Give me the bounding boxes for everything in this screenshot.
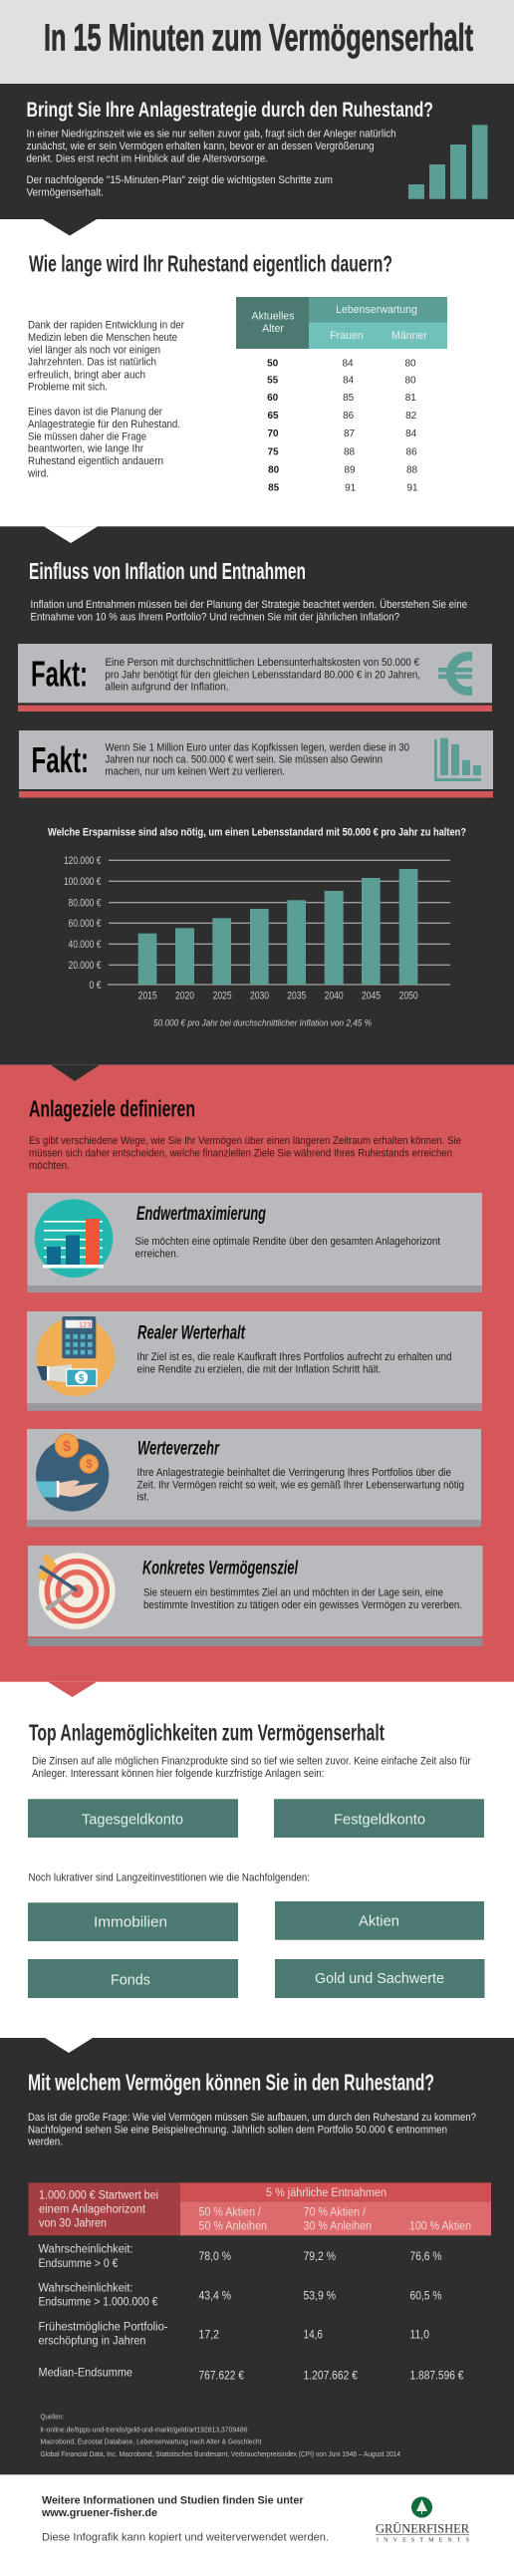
button: Immobilien: Immobilien (94, 1913, 167, 1930)
icon: calculator and money: 123 (79, 1320, 92, 1329)
text block: sources: Macrobond, Eurostat Database, Lebenserwartung nach Alter & Geschlecht (40, 2437, 261, 2446)
x axis labels: 2050 (399, 991, 418, 1002)
callout: fact 2: Wenn Sie 1 Million Euro unter das Kopfkissen legen, werden diese in 30 (106, 741, 409, 753)
button: Gold und Sachwerte: Gold und Sachwerte (315, 1970, 444, 1987)
text block: inflation intro: Inflation und Entnahmen müssen bei der Planung der Strategie beachtet werden. Überstehen Sie eine (30, 599, 467, 611)
card: consumption: Werteverzehr (137, 1438, 220, 1459)
button: Aktien: Aktien (359, 1912, 399, 1929)
table: life expectancy: 75 (267, 446, 279, 457)
icon: euro (438, 652, 472, 696)
arrow: section pointer (45, 2038, 93, 2053)
callout: fact 2: machen, nur um keinen Wert zu verlieren. (106, 765, 285, 777)
footer text (41, 2494, 329, 2544)
button: Aktien (275, 1901, 484, 1940)
table: life expectancy: Lebenserwartung (336, 304, 417, 316)
text block: example (27, 2112, 476, 2148)
x axis labels: 2030 (250, 991, 269, 1002)
button: Gold und Sachwerte (275, 1959, 484, 1998)
x axis labels (138, 991, 418, 1002)
text block: sources: Quellen: (40, 2413, 64, 2422)
footer text: Diese Infografik kann kopiert und weiterverwendet werden. (42, 2532, 329, 2544)
text block: inflation intro (30, 599, 467, 623)
x axis labels: 2025 (213, 991, 232, 1002)
table: withdrawal scenarios: 30 % Anleihen (303, 2221, 372, 2233)
callout: fact 1: Eine Person mit durchschnittlichen Lebensunterhaltskosten von 50.000 € (106, 657, 419, 669)
table: withdrawal scenarios: Wahrscheinlichkeit: (38, 2282, 133, 2294)
icon: calculator and money: $ (79, 1373, 85, 1384)
arrow: section pointer (44, 526, 98, 543)
x axis labels: 2045 (362, 991, 381, 1002)
table: withdrawal scenarios: 5 % jährliche Entnahmen (266, 2187, 386, 2199)
heading: inflation: Einfluss von Inflation und Entnahmen (29, 558, 306, 584)
table: life expectancy: 81 (405, 393, 416, 404)
callout: fact 2 (19, 730, 493, 797)
panel: retirement duration (27, 219, 447, 493)
text block: life expectancy: Sie müssen daher die Frage (28, 430, 146, 442)
table: life expectancy: 70 (267, 429, 279, 439)
table: withdrawal scenarios: 14,6 (303, 2330, 323, 2342)
icon: coins and hand (36, 1434, 109, 1512)
footer (41, 2494, 469, 2544)
icon: coins and hand: $ (86, 1459, 93, 1471)
card: final value: Endwertmaximierung (136, 1204, 266, 1225)
button: Immobilien (28, 1902, 238, 1941)
arrow: section pointer (48, 1682, 97, 1697)
x axis labels: 2040 (325, 991, 344, 1002)
card: concrete target: Sie steuern ein bestimmtes Ziel an und möchten in der Lage sein, eine (143, 1586, 443, 1598)
text block: sources: Global Financial Data, Inc. Macrobond, Statistisches Bundesamt, Verbraucherpreisindex (CPI) von Juni 1948 – August 2014 (40, 2449, 400, 2458)
text block: inflation intro: Entnahme von 10 % aus Ihrem Portfolio? Und rechnen Sie mit der jährlichen Inflation? (30, 611, 399, 623)
intro text (26, 129, 396, 199)
intro text: denkt. Dies erst recht im Hinblick auf die Altersvorsorge. (26, 153, 268, 165)
card: concrete target: Konkretes Vermögensziel (142, 1558, 298, 1578)
chart title: Welche Ersparnisse sind also nötig, um einen Lebensstandard mit 50.000 € pro Jahr zu halten? (48, 826, 466, 838)
table: life expectancy: 80 (268, 464, 280, 475)
table: withdrawal scenarios: 50 % Aktien / (199, 2206, 262, 2218)
callout: fact 1: Fakt: (31, 654, 88, 695)
table: life expectancy: 88 (406, 464, 417, 475)
y axis labels (64, 855, 102, 992)
table: life expectancy: Alter (262, 323, 284, 335)
header: title band (0, 0, 514, 84)
intro text: In einer Niedrigzinszeit wie es sie nur selten zuvor gab, fragt sich der Anleger natürlich (26, 129, 396, 141)
table: withdrawal scenarios: 1.207.662 € (303, 2371, 359, 2383)
chart caption: 50.000 € pro Jahr bei durchschnittlicher Inflation von 2,45 % (153, 1017, 372, 1028)
text block: goals intro: möchten. (29, 1160, 70, 1172)
table: life expectancy: 89 (344, 464, 356, 475)
table: withdrawal scenarios: einem Anlagehorizont (39, 2203, 146, 2215)
intro text: zunächst, wie er sein Vermögen erhalten kann, bevor er an dessen Vergrößerung (26, 141, 375, 152)
text block: short term: Anleger. Interessant können hier folgende kurzfristige Anlagen sein: (32, 1768, 325, 1780)
text block: life expectancy: Medizin leben die Menschen heute (28, 332, 177, 344)
icon: chart circle (35, 1199, 113, 1278)
heading: goals: Anlageziele definieren (29, 1096, 195, 1122)
text block: example: Nachfolgend sehen Sie eine Beispielrechnung. Jährlich sollen dem Portfolio 50.000 € entnommen (28, 2124, 447, 2136)
table: life expectancy: 84 (343, 376, 355, 387)
x axis labels: 2035 (287, 991, 306, 1002)
panel: inflation and withdrawals (0, 526, 514, 1065)
table: life expectancy: Aktuelles (251, 311, 295, 323)
logo: Grüner Fisher Investments: INVESTMENTS (377, 2538, 469, 2544)
button: Fonds (28, 1959, 238, 1998)
table: life expectancy: 65 (267, 411, 279, 422)
callout: fact 2: Fakt: (32, 739, 89, 780)
table: withdrawal scenarios: erschöpfung in Jahren (38, 2336, 145, 2348)
table: life expectancy: 85 (343, 393, 355, 404)
text block: life expectancy: Anlagestrategie für den Ruhestand. (28, 419, 180, 430)
panel: investment goals (0, 1065, 514, 1682)
logo: Grüner Fisher Investments: GRÜNERFISHER (376, 2521, 469, 2536)
table: withdrawal scenarios: 17,2 (199, 2330, 219, 2342)
y axis labels: 120.000 € (64, 855, 102, 867)
table: withdrawal scenarios: Median-Endsumme (38, 2367, 132, 2379)
table: withdrawal scenarios: 1.887.596 € (410, 2371, 464, 2383)
card: real value: Ihr Ziel ist es, die reale Kaufkraft Ihres Portfolios aufrecht zu erhalten und (137, 1351, 452, 1363)
x axis labels: 2015 (138, 991, 157, 1002)
bars (138, 869, 417, 985)
icon: coins and hand: $ (63, 1438, 72, 1455)
text block: sources: lr-online.de/tipps-und-trends/geld-und-markt/geld/art192813,3709486 (40, 2425, 247, 2433)
text block: sources (40, 2413, 400, 2458)
text block: life expectancy: Jahrzehnten. Das ist natürlich (28, 357, 156, 369)
icon: calculator and money (36, 1316, 115, 1396)
card: consumption: ist. (137, 1492, 149, 1504)
table: withdrawal scenarios: 11,0 (410, 2330, 429, 2342)
icon: target and arrow (37, 1553, 116, 1629)
button: Fonds: Fonds (111, 1972, 150, 1989)
text block: goals intro: Es gibt verschiedene Wege, wie Sie Ihr Vermögen über einen längeren Zeitraum erhalten können. Sie (29, 1135, 461, 1147)
table: life expectancy: 84 (342, 359, 354, 370)
y axis labels: 60.000 € (68, 918, 102, 930)
text block: life expectancy: wird. (27, 467, 49, 479)
table: withdrawal scenarios: 60,5 % (410, 2290, 442, 2302)
table: withdrawal scenarios: 70 % Aktien / (303, 2206, 367, 2218)
button: Tagesgeldkonto: Tagesgeldkonto (82, 1812, 183, 1829)
table: life expectancy: 55 (267, 376, 279, 387)
card: real value: Realer Werterhalt (137, 1322, 245, 1343)
table: life expectancy: 82 (405, 411, 417, 422)
y axis labels: 20.000 € (68, 960, 102, 972)
table: withdrawal scenarios: 79,2 % (303, 2251, 336, 2263)
table: life expectancy: 80 (404, 359, 416, 370)
text block: life expectancy: Ruhestand eigentlich andauern (28, 455, 163, 467)
table: life expectancy: 50 (267, 359, 279, 370)
table: withdrawal scenarios: 100 % Aktien (409, 2221, 471, 2233)
x axis labels: 2020 (175, 991, 194, 1002)
button: Festgeldkonto: Festgeldkonto (334, 1811, 425, 1828)
text block: short term: Die Zinsen auf alle möglichen Finanzprodukte sind so tief wie selten zuvor. Keine einfache Zeit also für (32, 1756, 471, 1768)
text block: life expectancy: Dank der rapiden Entwicklung in der (28, 320, 184, 332)
table: life expectancy: 86 (343, 411, 355, 422)
text block: goals intro (29, 1135, 461, 1172)
table: withdrawal scenarios: 1.000.000 € Startwert bei (39, 2189, 158, 2201)
text block: example: Das ist die große Frage: Wie viel Vermögen müssen Sie aufbauen, um durch den Ruhestand zu kommen? (28, 2112, 476, 2124)
table: life expectancy: 86 (405, 446, 417, 457)
y axis labels: 40.000 € (68, 939, 102, 951)
y axis labels: 0 € (90, 980, 102, 992)
table: withdrawal scenarios: 76,6 % (410, 2251, 442, 2263)
arrow: section pointer (43, 219, 97, 235)
table: life expectancy: 60 (267, 393, 279, 404)
arrow: section pointer (51, 1065, 100, 1081)
table: life expectancy (236, 297, 447, 493)
text block: life expectancy: Eines davon ist die Planung der (28, 407, 162, 419)
button: Festgeldkonto (274, 1799, 484, 1838)
table: withdrawal scenarios: 43,4 % (199, 2290, 231, 2302)
panel: introduction (0, 84, 514, 219)
icon: rising bars (408, 125, 488, 199)
y axis labels: 80.000 € (68, 897, 102, 909)
card: consumption (27, 1429, 481, 1527)
table: withdrawal scenarios: von 30 Jahren (39, 2217, 107, 2229)
card: consumption: Zeit. Ihr Vermögen reicht so weit, wie es gemäß Ihrer Lebenserwartung nötig (137, 1479, 464, 1491)
table: life expectancy: 80 (404, 376, 416, 387)
card: final value: Sie möchten eine optimale Rendite über den gesamten Anlagehorizont (135, 1236, 440, 1248)
chart: required savings (48, 826, 466, 1028)
table: life expectancy: Frauen (330, 330, 364, 342)
intro text: Der nachfolgende "15-Minuten-Plan" zeigt die wichtigsten Schritte zum (26, 174, 333, 186)
callout: fact 1: pro Jahr benötigt für den gleichen Lebensstandard 80.000 € in 20 Jahren, (106, 669, 420, 681)
panel: required wealth (0, 2038, 514, 2474)
text block: life expectancy: Probleme mit sich. (28, 382, 108, 394)
table: withdrawal scenarios: 78,0 % (199, 2251, 231, 2263)
table: withdrawal scenarios: Endsumme > 0 € (38, 2258, 119, 2270)
table: withdrawal scenarios: Endsumme > 1.000.000 € (38, 2296, 158, 2308)
table: life expectancy: 91 (406, 482, 418, 493)
text block: short term (32, 1756, 471, 1780)
panel: top investment options (28, 1682, 484, 1998)
footer text: www.gruener-fisher.de (41, 2507, 157, 2519)
table: life expectancy: 87 (344, 429, 355, 439)
card: final value (28, 1193, 482, 1292)
table: withdrawal scenarios: 53,9 % (303, 2290, 336, 2302)
text block: example: werden. (27, 2137, 63, 2148)
table: withdrawal scenarios: Frühestmögliche Portfolio- (38, 2322, 168, 2334)
card: real value: eine Rendite zu erzielen, die mit der Inflation Schritt hält. (137, 1364, 381, 1376)
card: consumption: Ihre Anlagestrategie beinhaltet die Verringerung Ihres Portfolios über die (137, 1467, 451, 1479)
text block: life expectancy: viel länger als noch vor einigen (28, 344, 160, 356)
table: withdrawal scenarios: Wahrscheinlichkeit: (38, 2244, 133, 2256)
y axis labels: 100.000 € (64, 876, 102, 888)
card: concrete target: bestimmte Investition zu tätigen oder ein gewisses Vermögen zu vererben. (143, 1599, 462, 1611)
text block: long term: Noch lukrativer sind Langzeitinvestitionen wie die Nachfolgenden: (28, 1872, 310, 1884)
card: concrete target (28, 1546, 482, 1646)
card: real value (27, 1311, 482, 1411)
table: withdrawal scenarios: 50 % Anleihen (199, 2221, 267, 2233)
callout: fact 1: allein aufgrund der Inflation. (106, 682, 229, 694)
table: life expectancy: Männer (391, 330, 427, 342)
text block: life expectancy: beantworten, wie lange Ihr (28, 443, 143, 455)
callout: fact 1 (18, 644, 492, 712)
intro text: Vermögenserhalt. (26, 187, 104, 199)
table: withdrawal scenarios (28, 2182, 491, 2383)
button: Tagesgeldkonto (28, 1799, 238, 1838)
table: life expectancy: 84 (405, 429, 417, 439)
logo: Grüner Fisher Investments (376, 2497, 469, 2544)
table: life expectancy: 85 (268, 482, 280, 493)
table: life expectancy: 88 (344, 446, 355, 457)
card: final value: erreichen. (135, 1248, 179, 1260)
footer text: Weitere Informationen und Studien finden Sie unter (42, 2494, 304, 2506)
callout: fact 2: Jahren nur noch ca. 500.000 € wert sein. Sie müssen also Gewinn (106, 753, 383, 765)
text block: life expectancy (27, 320, 184, 479)
icon: falling bars (434, 738, 481, 781)
text block: life expectancy: erfreulich, bringt aber auch (28, 369, 145, 381)
table: life expectancy: 91 (345, 482, 357, 493)
text block: goals intro: müssen sich daher entscheiden, welche finanziellen Ziele Sie während Ihres Ruhestands erreichen (29, 1148, 452, 1160)
table: withdrawal scenarios: 767.622 € (199, 2371, 245, 2383)
